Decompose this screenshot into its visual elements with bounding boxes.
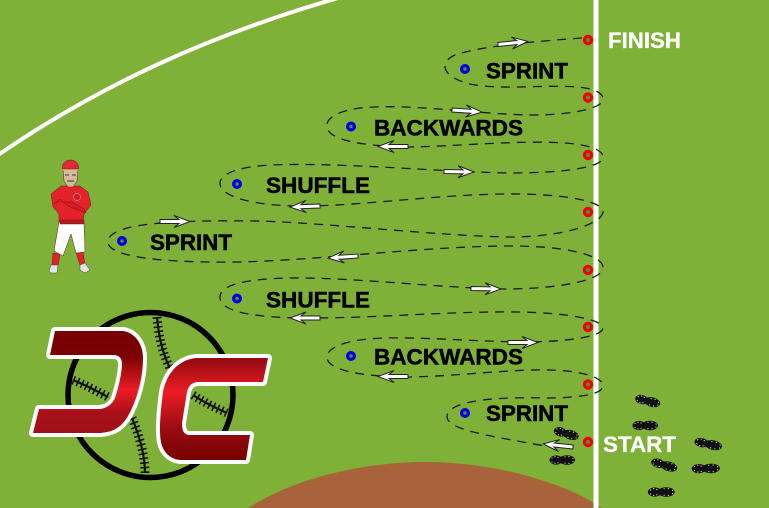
pants	[54, 222, 85, 256]
dashed running route	[108, 38, 603, 446]
baseball logo ring	[68, 312, 233, 478]
start label: START	[603, 432, 677, 457]
face	[63, 169, 78, 187]
logo letter C	[160, 358, 268, 460]
red cones	[584, 36, 592, 446]
drill labels: SPRINT	[486, 58, 569, 84]
logo letter D	[33, 331, 143, 433]
baseball stitches	[73, 317, 227, 473]
drill labels: BACKWARDS	[374, 344, 523, 370]
socks	[52, 252, 85, 266]
cap	[62, 160, 79, 169]
crossed arms	[54, 199, 86, 213]
curved outfield line	[0, 0, 338, 155]
drill labels: SPRINT	[150, 230, 233, 255]
drill labels: SHUFFLE	[266, 288, 370, 312]
drill labels: SPRINT	[486, 401, 569, 426]
chest logo	[74, 194, 80, 200]
coach figure	[49, 160, 91, 273]
foul line	[594, 0, 598, 508]
jersey	[51, 186, 91, 222]
drill labels: BACKWARDS	[374, 116, 523, 140]
finish label: FINISH	[608, 28, 681, 53]
eyes and hair	[65, 174, 76, 176]
shoes	[49, 263, 90, 273]
infield dirt	[248, 462, 602, 508]
belt	[60, 220, 84, 224]
drill labels	[150, 58, 569, 426]
blue cones	[119, 66, 468, 416]
drill labels: SHUFFLE	[266, 173, 370, 198]
cleat footprints	[550, 393, 723, 497]
cap brim	[62, 168, 78, 170]
direction arrows	[160, 35, 574, 453]
smile	[67, 180, 74, 182]
